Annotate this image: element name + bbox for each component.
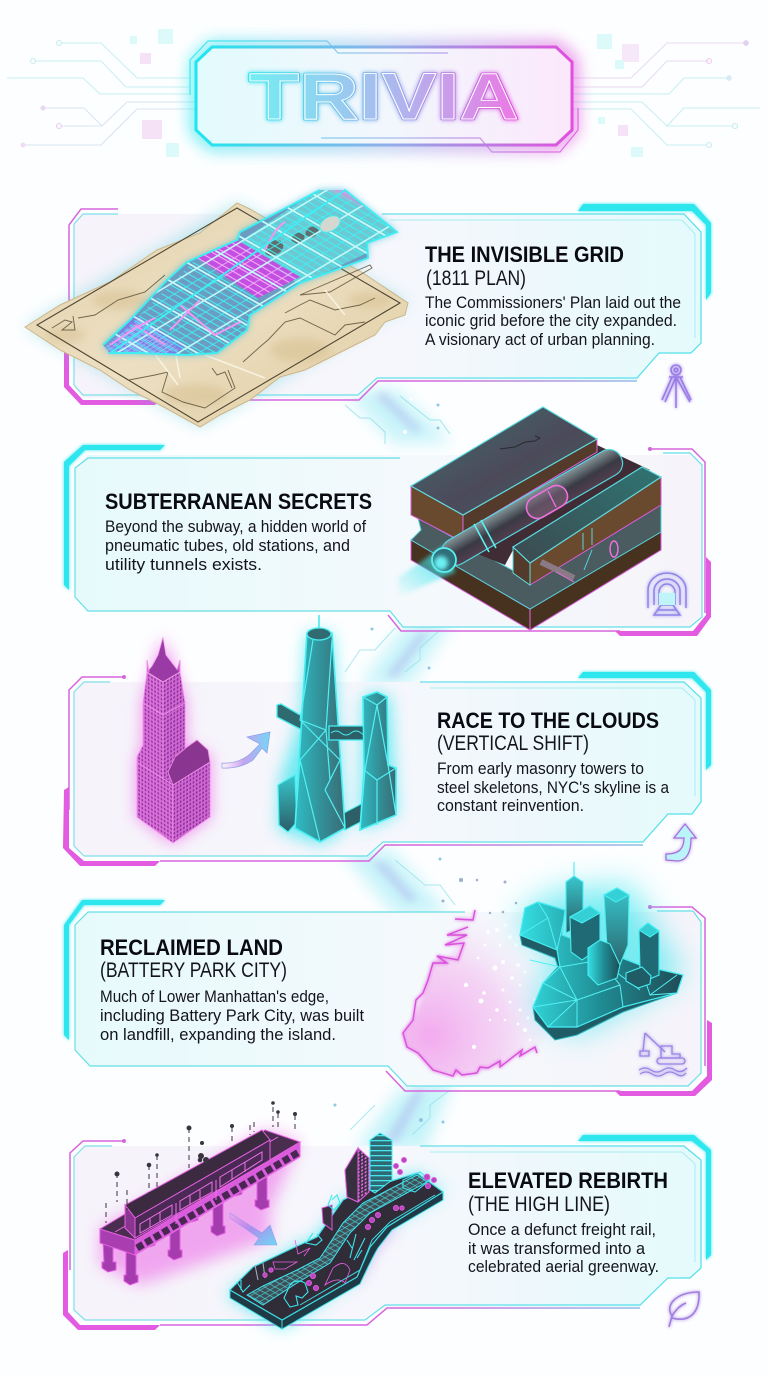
body copy: pneumatic tubes, old stations, and (105, 537, 350, 555)
panel 2 magenta accent line (388, 449, 705, 631)
connector streak 2 (345, 618, 455, 685)
arrow: viaduct to park (230, 1213, 277, 1245)
paper (25, 203, 408, 427)
deck side cells (137, 1152, 299, 1248)
panel 4 thick magenta corner (615, 1020, 712, 1096)
island top (520, 902, 683, 1027)
body copy: constant reinvention. (437, 797, 584, 815)
tube mouth (432, 548, 456, 572)
icon: crane on water (639, 1033, 687, 1076)
connector streak 4 (334, 1075, 455, 1150)
dissolving particles (464, 923, 541, 1049)
edge line (300, 1195, 435, 1305)
panel 4 magenta accent line (386, 907, 705, 1091)
decay particles (106, 1102, 296, 1223)
body copy (425, 294, 681, 349)
park glow (230, 1173, 443, 1329)
main shaft (295, 633, 345, 842)
panel 1 frame lines (74, 214, 701, 395)
panel 2 text (105, 489, 372, 574)
street grid (107, 190, 393, 354)
island outline (103, 190, 397, 355)
shoreline outline (403, 910, 537, 1076)
island base (520, 902, 683, 1040)
slab top (230, 1173, 443, 1320)
panel 1 magenta accent line (69, 209, 637, 400)
upper island tint (242, 190, 395, 284)
body copy: Beyond the subway, a hidden world of (105, 518, 366, 536)
subheading: (BATTERY PARK CITY) (100, 959, 287, 982)
panel 5 inner line (430, 1152, 695, 1262)
body copy: Much of Lower Manhattan's edge, (100, 988, 329, 1006)
small planter block (322, 1205, 332, 1230)
title circuit lines left (7, 29, 195, 157)
island facets (520, 902, 677, 1027)
broadway magenta lines (110, 222, 285, 345)
panel 3 text (437, 708, 670, 815)
panel 4 frame lines (75, 911, 701, 1086)
illustration: landfill city (520, 862, 683, 1040)
panel 1: the invisible grid (25, 170, 711, 427)
magenta plants (263, 1157, 437, 1291)
heading: RACE TO THE CLOUDS (437, 708, 659, 733)
title banner (190, 41, 578, 152)
illustration: old freight viaduct (100, 1102, 300, 1285)
panel 2 background (75, 455, 702, 627)
surface crack (500, 436, 540, 449)
right slab top (513, 467, 661, 563)
panel 3 inner line (430, 688, 695, 796)
map roads (148, 290, 345, 385)
viaduct glow (100, 1130, 300, 1285)
tunnel tube (398, 445, 627, 597)
map coast lines (52, 265, 375, 408)
middle grey layer (411, 500, 661, 609)
heading: ELEVATED REBIRTH (468, 1168, 668, 1193)
panel 5 magenta accent line (70, 1141, 640, 1325)
banner accent lines (190, 41, 578, 152)
right tower (360, 692, 396, 830)
panel 2 thick cyan corner (64, 445, 165, 590)
title glow: TRIVIA (249, 59, 519, 133)
train side (135, 1140, 270, 1238)
subheading: (1811 PLAN) (426, 267, 526, 290)
icon: upward arrow (666, 824, 696, 861)
walkway (247, 1175, 427, 1305)
train roof (125, 1130, 270, 1218)
map shadow (25, 203, 408, 427)
panel 1 thick cyan corner (578, 204, 711, 300)
shoreline fill (403, 910, 570, 1075)
panel 4 thick cyan corner (64, 900, 165, 1040)
tower glow (278, 633, 397, 845)
panel 5 thick cyan corner (578, 1135, 711, 1260)
panel 3 frame lines (74, 682, 701, 856)
map sheet (25, 170, 420, 427)
magenta pod (522, 481, 572, 523)
annex roof (168, 740, 210, 785)
piers (102, 1169, 269, 1285)
body copy (437, 760, 670, 815)
body copy: on landfill, expanding the island. (100, 1026, 336, 1044)
base layer (411, 530, 661, 630)
channel (463, 445, 650, 565)
body copy: iconic grid before the city expanded. (425, 312, 677, 330)
body copy: it was transformed into a (468, 1240, 646, 1258)
panel 2 frame lines (75, 453, 702, 627)
map inner border (37, 208, 400, 422)
paper stains (45, 290, 392, 406)
panel 4: reclaimed land (64, 862, 712, 1096)
panel 5 text (468, 1168, 668, 1276)
icon: surveyor tripod (662, 365, 691, 408)
title: TRIVIA (249, 59, 519, 133)
panel 5 thick magenta corner (63, 1250, 160, 1330)
body copy: The Commissioners' Plan laid out the (425, 294, 681, 312)
body copy: including Battery Park City, was built (100, 1007, 364, 1025)
base right face (173, 762, 210, 843)
panel 4 background (75, 912, 701, 1086)
tube beam (398, 545, 455, 597)
panel 5: elevated rebirth (63, 1102, 711, 1330)
panel 3 magenta accent line (69, 677, 643, 861)
subheading: (THE HIGH LINE) (468, 1193, 610, 1216)
body copy (100, 988, 364, 1044)
illustration: modern tower (277, 615, 397, 845)
panel 1 inner frame line (390, 220, 695, 338)
shaft left face (137, 703, 163, 790)
panel 5 frame lines (74, 1146, 701, 1320)
title circuit lines right (573, 34, 760, 157)
subheading: (VERTICAL SHIFT) (437, 732, 589, 755)
illustration: masonry tower (137, 637, 210, 843)
sky bridge (329, 726, 368, 740)
panel 2 thick magenta corner (615, 557, 711, 636)
slab side (230, 1192, 443, 1329)
deck side (135, 1142, 300, 1255)
island glow (520, 885, 683, 1035)
panel 3 thick cyan corner (578, 672, 711, 770)
striped tower (370, 1133, 392, 1193)
midtown magenta (197, 240, 300, 298)
body copy: celebrated aerial greenway. (468, 1258, 659, 1276)
panel 1 background (74, 214, 701, 398)
small pipes (541, 562, 574, 578)
panel 3 background (74, 682, 701, 856)
left slab side (411, 486, 463, 542)
left slab top (411, 407, 597, 515)
panel 4 text (100, 935, 364, 1044)
train windows (140, 1152, 262, 1233)
panel 5 background (74, 1146, 701, 1320)
island glow (103, 190, 397, 355)
body copy: steel skeletons, NYC's skyline is a (437, 779, 670, 797)
deck railing lines (115, 1137, 278, 1232)
panel 1 thick magenta corner (64, 347, 160, 405)
shaft facets (295, 640, 345, 842)
skyscrapers (566, 862, 659, 988)
ground bridge (340, 802, 378, 830)
illustration: old shoreline (403, 878, 570, 1076)
body copy: utility tunnels exists. (105, 556, 262, 574)
crown (147, 637, 180, 682)
banner frame (196, 47, 572, 145)
body copy (105, 518, 366, 574)
grey drift particles (442, 878, 517, 914)
shaft right face (163, 703, 185, 790)
connector streak 3 (340, 850, 463, 915)
heading: THE INVISIBLE GRID (425, 242, 624, 267)
banner glow (196, 47, 572, 145)
cyan plants (237, 1172, 430, 1307)
short box (278, 775, 297, 832)
left bridge stub (277, 704, 302, 730)
icon: leaf (669, 1292, 699, 1327)
icon: tunnel (648, 573, 686, 615)
tube body (437, 445, 627, 570)
tube collar (474, 520, 496, 552)
heading: RECLAIMED LAND (100, 935, 283, 960)
magenta block (345, 1148, 369, 1202)
reservoir (320, 215, 340, 232)
body copy: From early masonry towers to (437, 760, 644, 778)
illustration: high line park (230, 1133, 443, 1329)
arrow: old to new (222, 732, 270, 768)
central park patches (265, 226, 319, 256)
right slab side (530, 477, 661, 585)
panel 2: subterranean secrets (64, 407, 711, 636)
deck top (100, 1130, 300, 1240)
connector streak 1 (345, 388, 452, 444)
tower glow (137, 637, 210, 843)
panel 3 thick magenta corner (63, 787, 160, 866)
panel 3: race to the clouds (63, 615, 711, 866)
body copy (468, 1221, 659, 1276)
base left face (137, 762, 173, 843)
body copy: A visionary act of urban planning. (425, 331, 655, 349)
heading: SUBTERRANEAN SECRETS (105, 489, 372, 514)
illustration: underground cross-section (398, 407, 661, 630)
island base tint (103, 190, 367, 354)
upper tier (143, 672, 163, 715)
body copy: Once a defunct freight rail, (468, 1221, 656, 1239)
neon manhattan grid (103, 190, 395, 354)
spire (318, 615, 320, 633)
panel 1 text (425, 242, 681, 349)
